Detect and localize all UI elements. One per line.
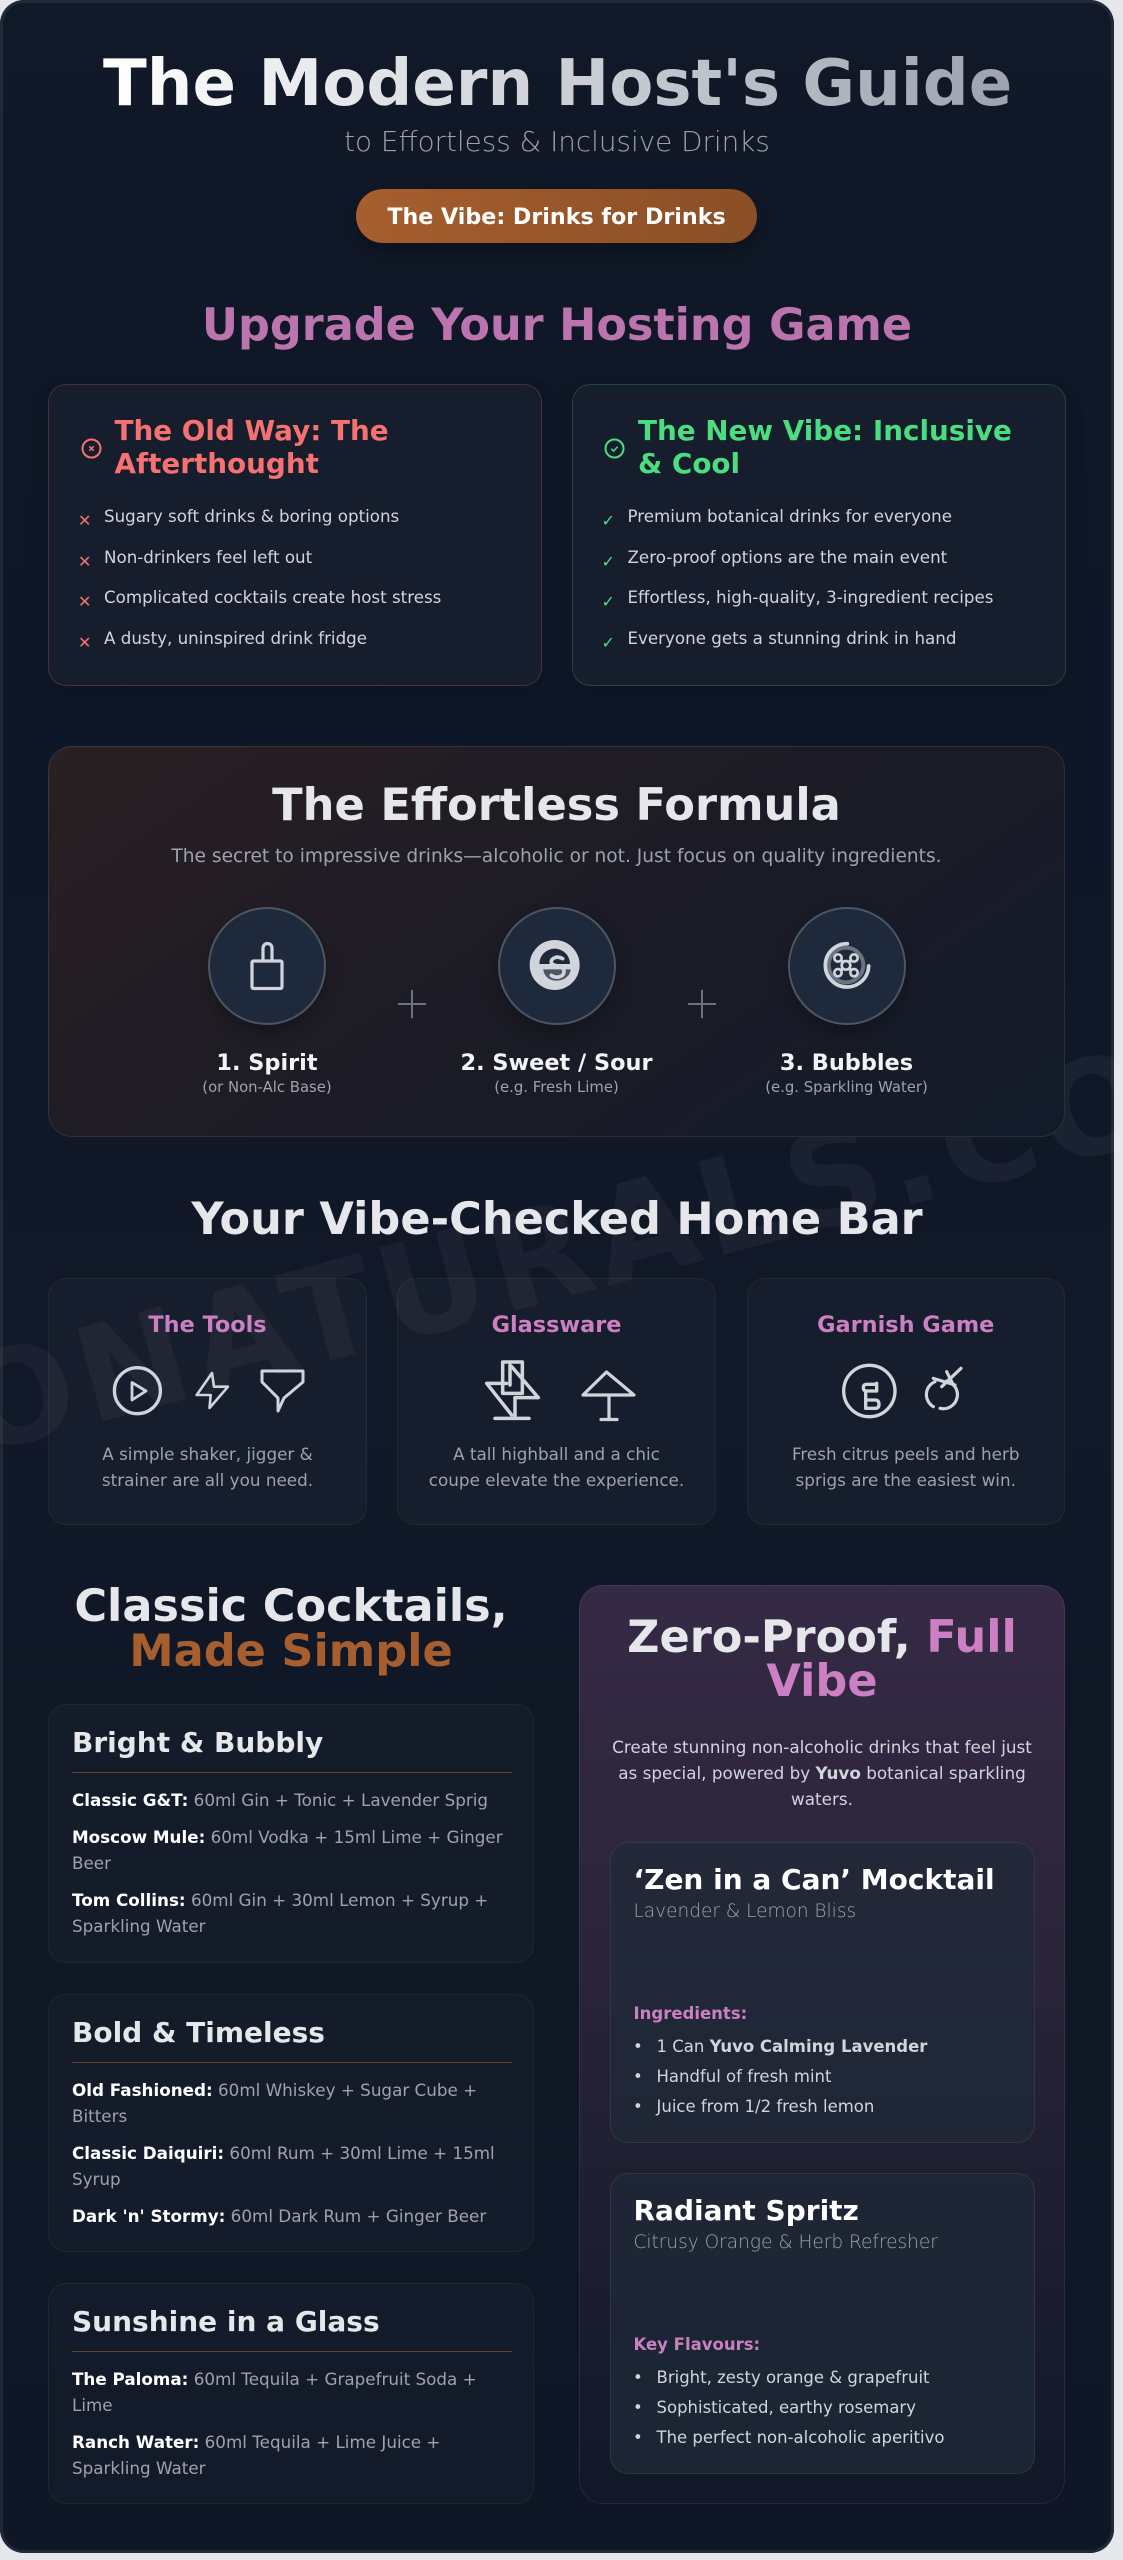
icon: herb garnish [924,1366,963,1410]
icon: x circle [82,438,102,458]
text: glassware: coupe elevate the experience. [429,1470,684,1490]
flavours list: • [633,2398,643,2416]
panel: the tools [48,1278,367,1525]
text: garnish [792,1444,1020,1490]
step: spirit [208,907,326,1025]
list: new vibe: Zero-proof options are the main event [628,546,947,566]
text: garnish: sprigs are the easiest win. [796,1470,1016,1490]
list: old way: ✕ [78,633,91,652]
panel: bold and timeless [48,1994,534,2252]
icon: shaker [112,1366,162,1416]
ingredients list: Handful of fresh mint [656,2066,831,2086]
heading: zero proof: Vibe [766,1655,878,1707]
list: new vibe: Effortless, high-quality, 3-ingredient recipes [628,586,993,606]
list: old way: A dusty, uninspired drink fridge [104,628,367,648]
label: bubbles: 3. Bubbles [780,1050,913,1076]
recipe list: Dark 'n' Stormy: 60ml Dark Rum + Ginger Beer [72,2206,486,2226]
list: new vibe: ✓ [602,633,615,652]
ingredients list: Juice from 1/2 fresh lemon [656,2096,874,2116]
heading: garnish: Garnish Game [817,1312,994,1338]
icon: plus 1 [398,990,426,1018]
text: garnish: Fresh citrus peels and herb [792,1444,1020,1464]
text: glassware [429,1444,684,1490]
ingredients list: 1 Can Yuvo Calming Lavender [656,2036,927,2056]
icon: bubbles [824,942,870,989]
icon: highball and martini glass [484,1360,540,1420]
text: zero proof intro [612,1736,1032,1808]
panel: new vibe [572,384,1066,686]
list: new vibe: ✓ [602,511,615,530]
icon: lime [530,940,580,990]
sublabel: sweet sour: (e.g. Fresh Lime) [494,1078,619,1096]
ingredients list [633,2036,928,2116]
heading: old way: Afterthought [114,447,319,480]
list: old way [78,506,441,652]
sublabel: bubbles: (e.g. Sparkling Water) [765,1078,928,1096]
heading: new vibe [638,414,1012,480]
step: bubbles [788,907,906,1025]
recipe list: The Paloma: 60ml Tequila + Grapefruit Soda + [72,2369,477,2389]
ingredients list: • [633,2096,643,2116]
icon: coupe glass [581,1370,636,1422]
heading: new vibe: The New Vibe: Inclusive [638,414,1012,446]
heading: glassware: Glassware [492,1312,621,1338]
recipe list: Classic G&T: 60ml Gin + Tonic + Lavender Sprig [72,1790,488,1810]
list: old way: ✕ [78,511,91,530]
panel: sunshine in a glass [48,2282,534,2504]
subtitle: to Effortless & Inclusive Drinks [344,125,770,158]
text: tools [102,1444,313,1490]
list: new vibe: ✓ [602,592,615,611]
list: old way: ✕ [78,552,91,571]
subtitle: Lavender & Lemon Bliss [634,1901,856,1922]
flavours list: • [633,2428,643,2446]
flavours list: • [633,2368,643,2386]
recipe list [72,1790,503,1936]
heading: new vibe: & Cool [638,447,740,480]
sublabel: spirit: (or Non-Alc Base) [202,1078,332,1096]
text: tools: strainer are all you need. [102,1470,313,1490]
list: new vibe: ✓ [602,552,615,571]
ingredients list: • [633,2066,643,2086]
recipe list: Bitters [72,2106,127,2126]
list: old way: ✕ [78,592,91,611]
ingredients list: • [633,2036,643,2056]
recipe list: Syrup [72,2169,121,2189]
text: tools: A simple shaker, jigger & [102,1444,313,1464]
heading: Bright & Bubbly [72,1726,323,1759]
icon: check circle [604,438,624,458]
heading: zero proof [627,1610,1017,1707]
step: sweet sour [498,907,616,1025]
recipe list: Tom Collins: 60ml Gin + 30ml Lemon + Syrup + [72,1890,488,1910]
icon: jigger [195,1372,230,1410]
recipe list: Sparkling Water [72,1916,206,1936]
panel: garnish [746,1278,1065,1525]
recipe list: Moscow Mule: 60ml Vodka + 15ml Lime + Ginger [72,1827,503,1847]
recipe list: Old Fashioned: 60ml Whiskey + Sugar Cube + [72,2080,477,2100]
flavours list: The perfect non-alcoholic aperitivo [656,2428,944,2446]
text: formula description: The secret to impressive drinks—alcoholic or not. Just focus on quality ingredients. [171,846,942,867]
heading: Bold & Timeless [72,2016,325,2049]
panel: effortless formula [48,746,1065,1137]
pill: the vibe: The Vibe: Drinks for Drinks [387,204,726,230]
icon: strainer [260,1370,304,1412]
recipe list: Sparkling Water [72,2458,206,2478]
flavours heading: Key Flavours: [634,2335,760,2354]
heading: classic cocktails [74,1580,508,1677]
recipe card: radiant spritz [610,2173,1035,2474]
heading: classic cocktails: Made Simple [129,1625,453,1677]
panel: old way [48,384,542,686]
heading: old way: The Old Way: The [114,414,389,446]
title: The Modern Host's Guide [103,46,1012,120]
heading: zero proof: Zero-Proof, Full [627,1610,1017,1662]
list: new vibe: Premium botanical drinks for everyone [628,506,952,526]
recipe list: Beer [72,1853,111,1873]
title: Radiant Spritz [634,2194,859,2227]
recipe list: Lime [72,2395,113,2415]
recipe card: zen in a can [610,1842,1035,2142]
heading: tools: The Tools [148,1312,267,1338]
list: old way: Non-drinkers feel left out [104,546,312,566]
label: sweet sour: 2. Sweet / Sour [460,1050,653,1076]
icon: plus 2 [688,990,716,1018]
recipe list [72,2080,495,2226]
flavours list: Sophisticated, earthy rosemary [656,2398,916,2416]
list: new vibe: Everyone gets a stunning drink in hand [628,628,956,648]
label: spirit: 1. Spirit [216,1050,318,1076]
heading: old way [114,414,389,480]
text: glassware: A tall highball and a chic [453,1444,660,1464]
panel: zero proof [579,1585,1065,2504]
subtitle: Citrusy Orange & Herb Refresher [634,2232,938,2253]
list: old way: Sugary soft drinks & boring options [104,506,399,526]
title: ‘Zen in a Can’ Mocktail [634,1863,995,1896]
list: new vibe [602,506,993,652]
heading: home bar: Your Vibe-Checked Home Bar [191,1193,923,1245]
heading: upgrade: Upgrade Your Hosting Game [202,300,912,351]
text: zero proof intro: Create stunning non-alcoholic drinks that feel just [612,1736,1032,1756]
recipe list [72,2369,477,2478]
recipe list: Classic Daiquiri: 60ml Rum + 30ml Lime + 15ml [72,2143,495,2163]
heading: classic cocktails: Classic Cocktails, [74,1580,508,1632]
flavours list: Bright, zesty orange & grapefruit [656,2368,930,2386]
flavours list [633,2368,944,2446]
list: old way: Complicated cocktails create host stress [104,586,441,606]
heading: Sunshine in a Glass [72,2305,380,2338]
panel: glassware [397,1278,716,1525]
text: zero proof intro: waters. [791,1788,853,1808]
icon: citrus peel [842,1364,897,1418]
ingredients heading: Ingredients: [634,2004,747,2023]
pill: the vibe [356,189,757,243]
recipe list: Ranch Water: 60ml Tequila + Lime Juice + [72,2432,440,2452]
panel: bright and bubbly [48,1704,534,1963]
icon: bottle [250,942,284,990]
text: zero proof intro: as special, powered by Yuvo botanical sparkling [618,1762,1026,1782]
heading: formula: The Effortless Formula [272,779,841,831]
